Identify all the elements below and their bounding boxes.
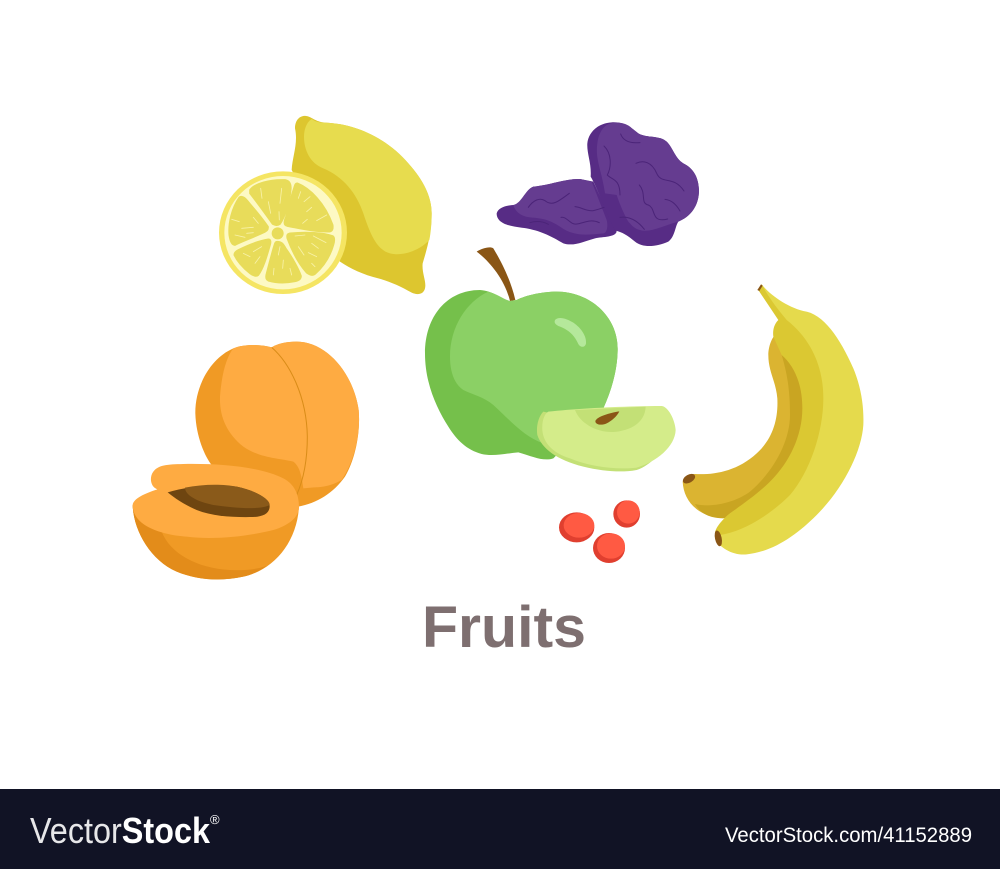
left plum	[497, 179, 617, 244]
icon: dried plums	[497, 122, 699, 246]
berries	[559, 500, 640, 563]
whole lemon	[292, 116, 432, 294]
title: Fruits	[422, 595, 586, 660]
apple slice	[537, 406, 676, 471]
apple stem	[477, 247, 515, 301]
footer bar	[0, 789, 1000, 869]
icon: bananas	[681, 284, 863, 554]
icon: green apple	[425, 247, 676, 563]
footer logo: VectorStock	[30, 810, 211, 851]
back banana	[681, 335, 813, 518]
whole apricot	[195, 342, 359, 507]
apricot half	[133, 464, 299, 579]
apple body	[425, 290, 618, 459]
lemon slice	[219, 171, 347, 294]
right plum	[587, 122, 699, 246]
icon: lemon	[219, 116, 432, 294]
icon: apricot	[133, 342, 359, 579]
footer image id: VectorStock.com/41152889	[725, 824, 972, 847]
front banana	[713, 284, 863, 554]
registered mark: ®	[210, 812, 220, 827]
